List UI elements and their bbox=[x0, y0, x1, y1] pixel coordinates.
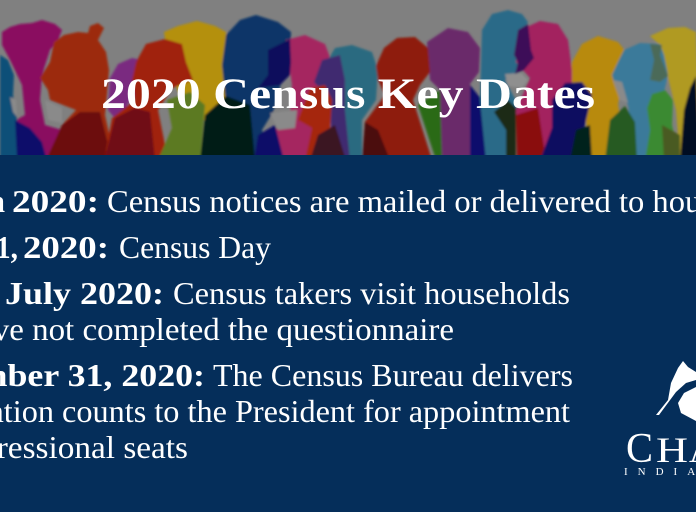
silhouette: dark red body bbox=[360, 122, 389, 155]
gap: grey by neck bbox=[505, 73, 528, 88]
silhouette: dark red body bbox=[104, 108, 155, 160]
title: 2020 Census Key Dates bbox=[101, 71, 595, 118]
date entry: census day bbox=[0, 229, 271, 265]
silhouette: red head bbox=[362, 37, 432, 160]
panel: dates background bbox=[0, 155, 696, 512]
silhouette: black body bbox=[570, 125, 592, 160]
silhouette: dark small head bbox=[494, 100, 516, 160]
silhouette: green child bbox=[645, 90, 680, 160]
gap: grey by pink figure bbox=[270, 110, 297, 130]
silhouette: curly magenta bbox=[2, 20, 62, 160]
silhouette: purple right bbox=[427, 28, 486, 160]
silhouette: yellow bbox=[164, 21, 228, 120]
date entry: census takers: Census takers visit households bbox=[173, 275, 570, 311]
silhouette: black-green body bbox=[200, 96, 255, 160]
silhouette: teal bbox=[328, 44, 380, 155]
silhouette: black right bbox=[680, 76, 696, 160]
date entry: census takers: July 2020: bbox=[5, 275, 164, 311]
silhouette: teal tall bbox=[480, 10, 528, 160]
date entry: census day: 2020: bbox=[23, 229, 109, 265]
silhouette: deep purple face bbox=[514, 24, 534, 74]
panel: silhouette banner bbox=[0, 0, 696, 160]
silhouette: blue face shadow bbox=[650, 44, 668, 82]
silhouette: bottom red bbox=[516, 108, 546, 160]
silhouette: far right yellow bbox=[650, 27, 696, 160]
silhouette: dark blue bbox=[222, 15, 291, 160]
silhouette: navy behind bbox=[470, 85, 487, 160]
silhouette: red bbox=[104, 39, 193, 160]
gap: grey under curly hair bbox=[10, 97, 17, 117]
silhouette: pink long hair bbox=[516, 21, 572, 160]
silhouette: far left blue bbox=[0, 55, 18, 160]
date entry: counts delivered bbox=[0, 357, 573, 465]
gap: grey beside neck bbox=[45, 100, 62, 123]
logo wordmark bbox=[626, 426, 696, 472]
silhouette: dark maroon body bbox=[310, 124, 346, 155]
silhouette: dark lower body bbox=[47, 111, 110, 155]
silhouette: green small bbox=[418, 90, 442, 160]
logo wordmark: C bbox=[626, 426, 653, 472]
date entry: census notices: 2020: bbox=[12, 183, 99, 219]
logo bbox=[624, 361, 696, 478]
silhouette: red-orange with bun bbox=[40, 23, 115, 160]
date entry: counts delivered: The Census Bureau delivers bbox=[213, 357, 573, 393]
logo wordmark: H bbox=[656, 430, 688, 470]
silhouette: navy lower bbox=[254, 124, 284, 155]
silhouette: navy person bbox=[540, 82, 592, 160]
icon: logo mark bbox=[656, 361, 696, 421]
silhouette: purple small bbox=[106, 56, 139, 118]
silhouette: olive body bbox=[662, 125, 680, 160]
silhouette: pink bbox=[274, 34, 331, 155]
silhouette: blue right bbox=[612, 43, 672, 160]
silhouette: dark green body bbox=[605, 106, 637, 160]
silhouette: navy face bbox=[258, 39, 291, 88]
date entry: census day: Census Day bbox=[119, 229, 271, 265]
silhouette: navy body bbox=[15, 120, 47, 160]
silhouette: yellow rear bbox=[570, 36, 626, 160]
silhouette: green bbox=[158, 92, 205, 160]
silhouette: small red bbox=[298, 85, 332, 160]
silhouette: dark purple bbox=[314, 55, 350, 160]
gap: grey between figures bbox=[613, 80, 628, 103]
date entry: census takers bbox=[0, 275, 570, 347]
